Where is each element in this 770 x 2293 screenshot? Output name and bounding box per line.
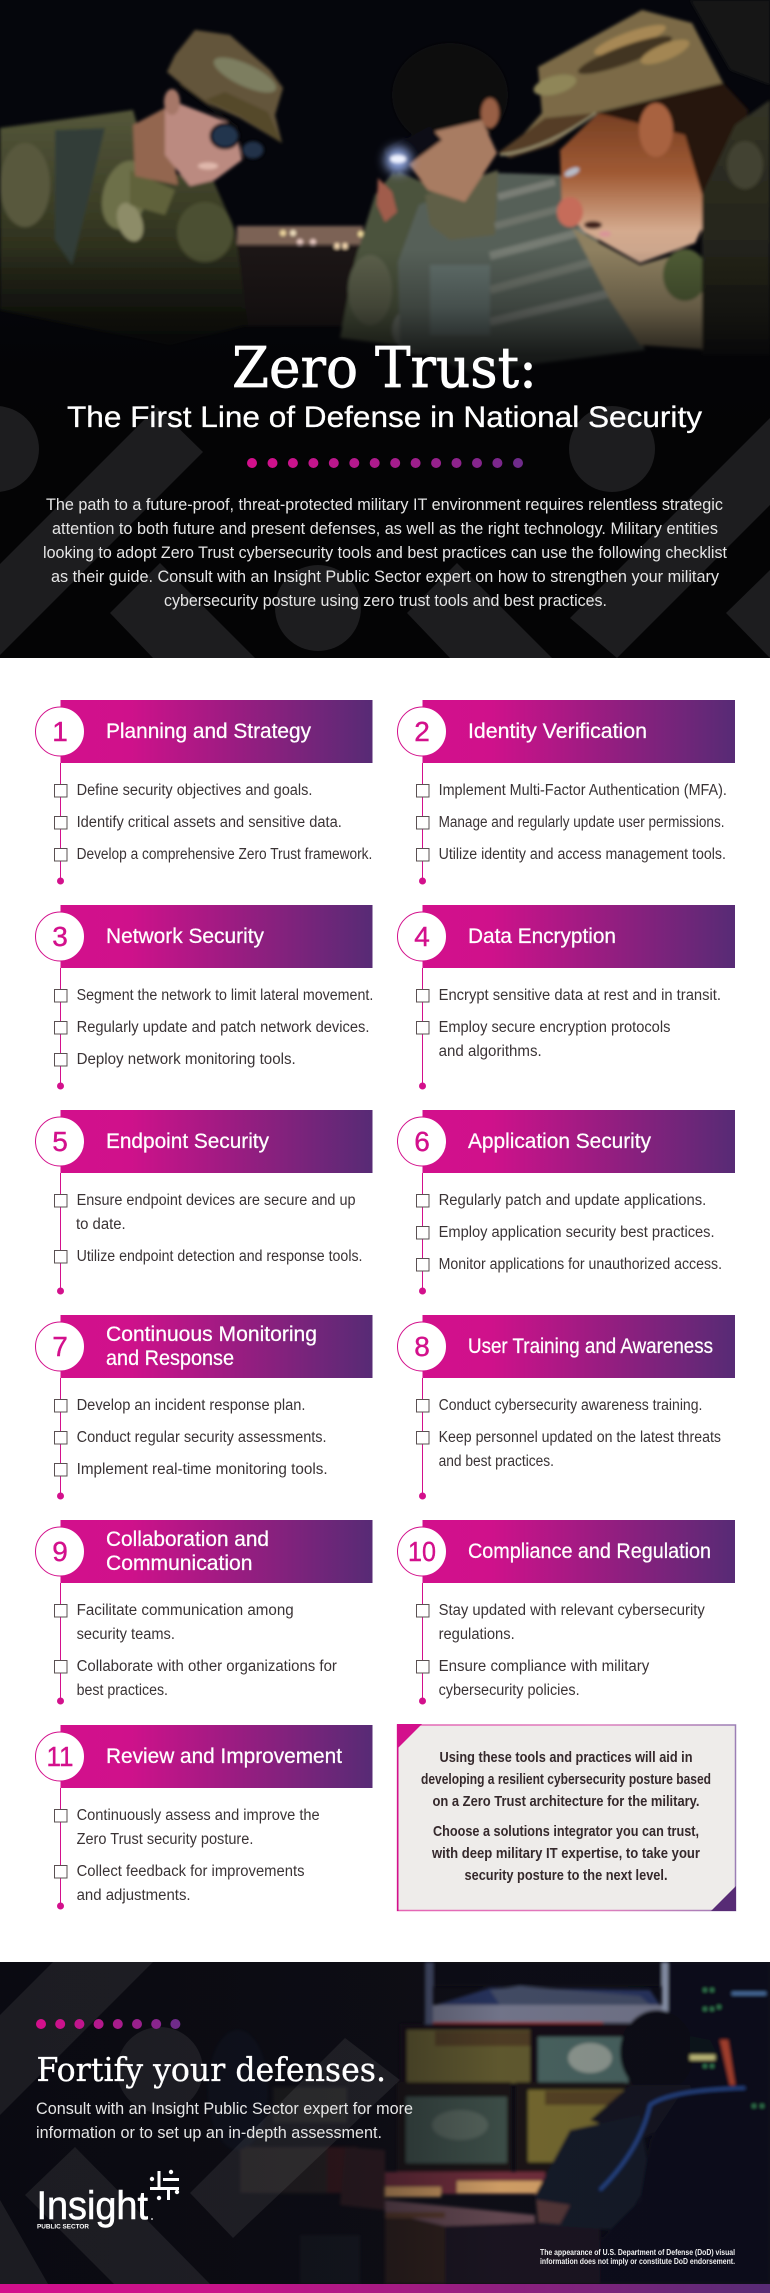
step 7 number badge — [36, 1322, 84, 1371]
step 7 number badge: 7 — [52, 1331, 68, 1362]
checklist item: Develop an incident response plan. — [77, 1397, 305, 1414]
step 8 number badge: 8 — [414, 1331, 430, 1362]
panel: step 5 endpoint security — [36, 1110, 372, 1294]
geometric background pattern — [0, 406, 770, 658]
step 11 number badge — [36, 1732, 84, 1781]
intro paragraph: attention to both future and present defenses, as well as the right technology. Military entities — [52, 519, 718, 538]
checklist item: Define security objectives and goals. — [77, 782, 312, 799]
checklist item — [54, 1602, 294, 1643]
checklist item: Collaborate with other organizations for — [77, 1658, 337, 1675]
server rack at right — [666, 1962, 770, 2111]
left soldier — [0, 30, 283, 345]
checklist item: and adjustments. — [77, 1887, 191, 1904]
step 3 timeline — [57, 968, 64, 1090]
lower-body shadows and fade — [23, 258, 770, 374]
footer backdrop — [0, 1962, 770, 2284]
step 3 number badge: 3 — [52, 921, 68, 952]
step 10 heading: Compliance and Regulation — [468, 1540, 711, 1563]
disclaimer — [540, 2248, 735, 2266]
centre soldier — [340, 94, 645, 372]
checklist item: regulations. — [439, 1626, 515, 1643]
step 9 number badge: 9 — [52, 1536, 68, 1567]
checklist item: Conduct cybersecurity awareness training. — [439, 1397, 702, 1414]
step 4 banner — [422, 905, 735, 968]
checklist item: Develop a comprehensive Zero Trust framework. — [77, 846, 372, 863]
hero panel — [0, 0, 770, 658]
checklist item: Zero Trust security posture. — [77, 1831, 253, 1848]
footer text: information or to set up an in-depth assessment. — [36, 2123, 382, 2142]
step 2 number badge — [398, 707, 446, 756]
step 5 number badge — [36, 1117, 84, 1166]
step 5 heading: Endpoint Security — [106, 1130, 269, 1153]
checklist item — [54, 1807, 320, 1848]
checklist item: Deploy network monitoring tools. — [77, 1051, 296, 1068]
logo: Insight Public Sector — [36, 2170, 179, 2231]
logo: Insight Public Sector: Insight — [36, 2184, 148, 2228]
step 8 heading: User Training and Awareness — [468, 1335, 713, 1358]
panel: step 3 network security — [36, 905, 373, 1090]
right soldier — [498, 0, 770, 355]
dim left room elements — [234, 2033, 386, 2210]
intro paragraph: The path to a future-proof, threat-protected military IT environment requires relentless strategic — [46, 495, 723, 514]
step 4 number badge: 4 — [414, 921, 430, 952]
checklist item: Monitor applications for unauthorized access. — [439, 1256, 722, 1273]
step 10 number badge: 10 — [408, 1536, 436, 1567]
step 6 timeline — [419, 1173, 426, 1294]
checklist item — [416, 1019, 671, 1060]
disclaimer: information does not imply or constitute DoD endorsement. — [540, 2257, 735, 2266]
checklist item: Ensure endpoint devices are secure and up — [77, 1192, 356, 1209]
checklist item: and algorithms. — [439, 1043, 542, 1060]
checklist item: Keep personnel updated on the latest threats — [439, 1429, 721, 1446]
intro paragraph: as their guide. Consult with an Insight Public Sector expert on how to strengthen your military — [51, 567, 719, 586]
panel: step 8 user training and awareness — [398, 1315, 735, 1500]
callout bottom-right corner — [711, 1886, 736, 1911]
step 3 number badge — [36, 912, 84, 961]
step 1 heading: Planning and Strategy — [106, 720, 311, 743]
callout text — [421, 1749, 711, 1884]
footer geometric overlay — [0, 1962, 400, 2284]
panel: step 11 review and improvement — [36, 1725, 372, 1910]
step 5 timeline — [57, 1173, 64, 1294]
step 5 number badge: 5 — [52, 1126, 68, 1157]
checklist item — [416, 1429, 721, 1470]
disclaimer: The appearance of U.S. Department of Defense (DoD) visual — [540, 2248, 735, 2257]
step 10 timeline — [419, 1583, 426, 1704]
callout text: security posture to the next level. — [464, 1867, 668, 1884]
step 8 timeline — [419, 1378, 426, 1500]
step 7 heading: and Response — [106, 1347, 234, 1370]
callout text: on a Zero Trust architecture for the military. — [432, 1793, 700, 1810]
step 11 number badge: 11 — [46, 1741, 74, 1772]
checklist item: security teams. — [77, 1626, 175, 1643]
panel: step 9 collaboration and communication — [36, 1520, 372, 1704]
checklist item: Utilize endpoint detection and response tools. — [77, 1248, 362, 1265]
footer dotted divider — [36, 2019, 180, 2029]
panel: step 4 data encryption — [398, 905, 735, 1090]
desk and light strips — [385, 2172, 600, 2284]
intro paragraph: cybersecurity posture using zero trust tools and best practices. — [164, 591, 607, 610]
rear monitors — [400, 2024, 640, 2086]
checklist item: Employ application security best practices. — [439, 1224, 715, 1241]
step 4 timeline — [419, 968, 426, 1090]
callout box — [398, 1725, 736, 1910]
step 4 number badge — [398, 912, 446, 961]
step 1 banner — [60, 700, 372, 763]
checklist item: and best practices. — [439, 1453, 554, 1470]
step 9 number badge — [36, 1527, 84, 1576]
intro paragraph: looking to adopt Zero Trust cybersecurity tools and best practices can use the following checklist — [43, 543, 727, 562]
step 11 timeline — [57, 1788, 64, 1910]
dotted divider — [247, 458, 523, 468]
step 7 heading — [106, 1323, 317, 1370]
checklist item: Regularly patch and update applications. — [439, 1192, 706, 1209]
checklist item: Regularly update and patch network devices. — [77, 1019, 369, 1036]
checklist item — [54, 1192, 356, 1233]
panel: step 6 application security — [398, 1110, 735, 1294]
checklist item: Implement real-time monitoring tools. — [77, 1461, 328, 1478]
checklist item: Ensure compliance with military — [439, 1658, 650, 1675]
photo: three soldiers studying a map at night — [0, 0, 770, 372]
step 1 number badge: 1 — [52, 716, 68, 747]
step 2 number badge: 2 — [414, 716, 430, 747]
intro paragraph — [43, 495, 727, 610]
callout text: with deep military IT expertise, to take your — [431, 1845, 700, 1862]
step 10 number badge — [398, 1527, 446, 1576]
step 3 banner — [60, 905, 372, 968]
step 7 timeline — [57, 1378, 64, 1500]
footer gradient bar — [0, 2284, 770, 2293]
checklist item: Facilitate communication among — [77, 1602, 294, 1619]
checklist item: Implement Multi-Factor Authentication (MFA). — [439, 782, 727, 799]
checklist item: Manage and regularly update user permissions. — [439, 814, 724, 831]
checklist item: Stay updated with relevant cybersecurity — [439, 1602, 705, 1619]
step 1 timeline — [57, 763, 64, 884]
checklist item: Identify critical assets and sensitive data. — [77, 814, 342, 831]
checklist item: Conduct regular security assessments. — [77, 1429, 327, 1446]
step 2 banner — [422, 700, 735, 763]
panel: step 2 identity verification — [398, 700, 735, 884]
step 11 banner — [60, 1725, 372, 1788]
photo: operator at monitors in a command room — [208, 1962, 770, 2284]
step 4 heading: Data Encryption — [468, 925, 616, 948]
step 6 number badge — [398, 1117, 446, 1166]
callout top-left corner — [397, 1724, 422, 1749]
logo: Insight Public Sector: PUBLIC SECTOR — [37, 2225, 90, 2231]
step 9 banner — [60, 1520, 372, 1583]
footer heading: Fortify your defenses. — [36, 2050, 386, 2089]
checklist item: Continuously assess and improve the — [77, 1807, 320, 1824]
step 9 heading: Communication — [106, 1552, 253, 1575]
step 8 number badge — [398, 1322, 446, 1371]
checklist item: Encrypt sensitive data at rest and in transit. — [439, 987, 721, 1004]
panel: step 10 compliance and regulation — [398, 1520, 735, 1704]
step 7 banner — [60, 1315, 372, 1378]
distant lit building — [234, 224, 366, 326]
checklist item — [54, 1658, 337, 1699]
checklist item — [54, 1863, 305, 1904]
step 7 heading: Continuous Monitoring — [106, 1323, 317, 1346]
checklist item: best practices. — [77, 1682, 168, 1699]
step 2 heading: Identity Verification — [468, 720, 647, 743]
step 3 heading: Network Security — [106, 925, 264, 948]
footer text: Consult with an Insight Public Sector expert for more — [36, 2099, 413, 2118]
checklist item: to date. — [76, 1216, 126, 1233]
panel: step 1 planning and strategy — [36, 700, 372, 884]
callout: closing recommendation — [397, 1724, 736, 1911]
step 5 banner — [60, 1110, 372, 1173]
desk lamp — [690, 2036, 735, 2085]
step 2 timeline — [419, 763, 426, 884]
title: Zero Trust: — [232, 336, 537, 401]
step 6 banner — [422, 1110, 735, 1173]
step 9 timeline — [57, 1583, 64, 1704]
checklist item — [416, 1658, 650, 1699]
step 6 number badge: 6 — [414, 1126, 430, 1157]
subtitle: The First Line of Defense in National Security — [67, 401, 702, 434]
footer panel — [0, 1962, 770, 2284]
checklist item: Utilize identity and access management tools. — [439, 846, 726, 863]
callout left edge — [397, 1725, 398, 1911]
checklist item: Employ secure encryption protocols — [439, 1019, 671, 1036]
callout text: Using these tools and practices will aid in — [440, 1749, 692, 1766]
panel: step 7 continuous monitoring and response — [36, 1315, 372, 1500]
solid dark lower hero — [0, 440, 770, 658]
callout text: Choose a solutions integrator you can trust, — [433, 1823, 699, 1840]
footer text — [36, 2099, 413, 2142]
step 10 banner — [422, 1520, 735, 1583]
checklist item: cybersecurity policies. — [439, 1682, 580, 1699]
hero backdrop — [0, 0, 770, 422]
step 9 heading — [106, 1528, 269, 1575]
step 9 heading: Collaboration and — [106, 1528, 269, 1551]
operator and chair — [535, 2010, 770, 2284]
upper shelf with flag — [425, 1962, 668, 2084]
front monitors — [397, 2082, 626, 2180]
scene dimming overlay — [209, 1962, 768, 2284]
checklist item — [416, 1602, 705, 1643]
step 8 banner — [422, 1315, 735, 1378]
checklist item: Collect feedback for improvements — [77, 1863, 305, 1880]
step 6 heading: Application Security — [468, 1130, 651, 1153]
step 11 heading: Review and Improvement — [106, 1745, 342, 1768]
checklist item: Segment the network to limit lateral movement. — [77, 987, 373, 1004]
step 1 number badge — [36, 707, 84, 756]
